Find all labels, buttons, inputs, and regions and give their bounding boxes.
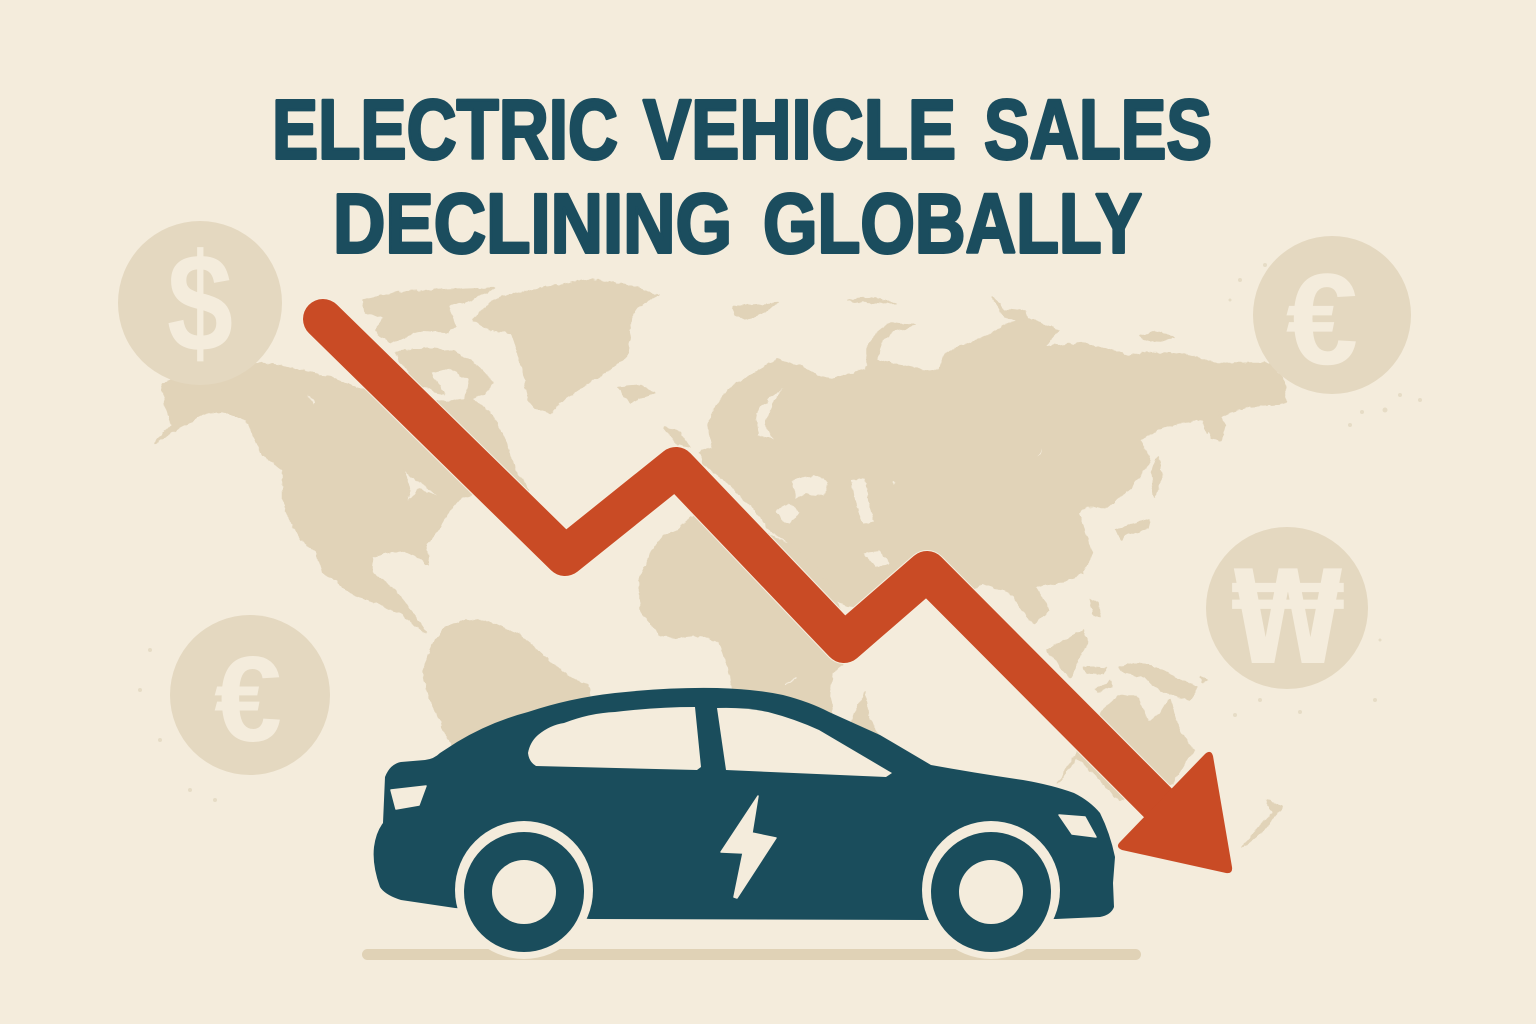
map: New Zealand bbox=[1243, 800, 1282, 847]
map: UK bbox=[664, 427, 690, 447]
front wheel bbox=[922, 821, 1060, 959]
paint speckles bbox=[138, 263, 1422, 802]
arrowhead bbox=[1118, 752, 1232, 873]
map: Philippines and Indonesia bbox=[1047, 600, 1207, 700]
coin: dollar bbox=[118, 221, 282, 385]
coin: won: ₩ bbox=[1231, 543, 1345, 694]
map: Canadian Arctic islands bbox=[363, 288, 495, 400]
tail light bbox=[391, 786, 426, 809]
title line 2: DECLINING bbox=[333, 176, 732, 270]
car body bbox=[374, 688, 1115, 920]
lightning bolt bbox=[721, 796, 776, 898]
front window bbox=[717, 708, 892, 777]
title line 1: SALES bbox=[984, 82, 1212, 176]
title line 2 bbox=[333, 176, 1142, 270]
headlight bbox=[1059, 815, 1096, 837]
coin: euro left: € bbox=[214, 631, 282, 767]
rear window bbox=[528, 707, 701, 770]
coin: euro right: € bbox=[1286, 246, 1358, 392]
title line 1: ELECTRIC bbox=[272, 82, 618, 176]
title line 1 bbox=[272, 82, 1212, 176]
map: South America bbox=[423, 620, 590, 800]
world map bbox=[154, 280, 1286, 847]
map: Australia bbox=[1057, 697, 1193, 800]
map: Greenland bbox=[473, 280, 658, 413]
map: Japan and Sakhalin bbox=[1116, 412, 1226, 540]
title line 1: VEHICLE bbox=[643, 82, 956, 176]
coin: dollar: $ bbox=[167, 224, 233, 381]
rear wheel bbox=[455, 821, 593, 959]
map: Africa bbox=[640, 510, 855, 730]
map: North America bbox=[154, 363, 529, 633]
coin: euro left bbox=[170, 615, 330, 775]
title line 2: GLOBALLY bbox=[763, 176, 1142, 270]
map: Arctic Russia islands bbox=[848, 298, 1174, 341]
coin: won bbox=[1206, 527, 1368, 694]
map: Eurasia bbox=[700, 317, 1286, 623]
title bbox=[272, 82, 1212, 270]
coin: euro right bbox=[1253, 236, 1411, 394]
electric car bbox=[374, 688, 1115, 959]
ground shadow bbox=[362, 949, 1141, 960]
declining arrow bbox=[323, 319, 1232, 873]
map: Iceland bbox=[618, 386, 654, 404]
map: Madagascar bbox=[850, 692, 878, 735]
map: Svalbard bbox=[733, 303, 778, 320]
